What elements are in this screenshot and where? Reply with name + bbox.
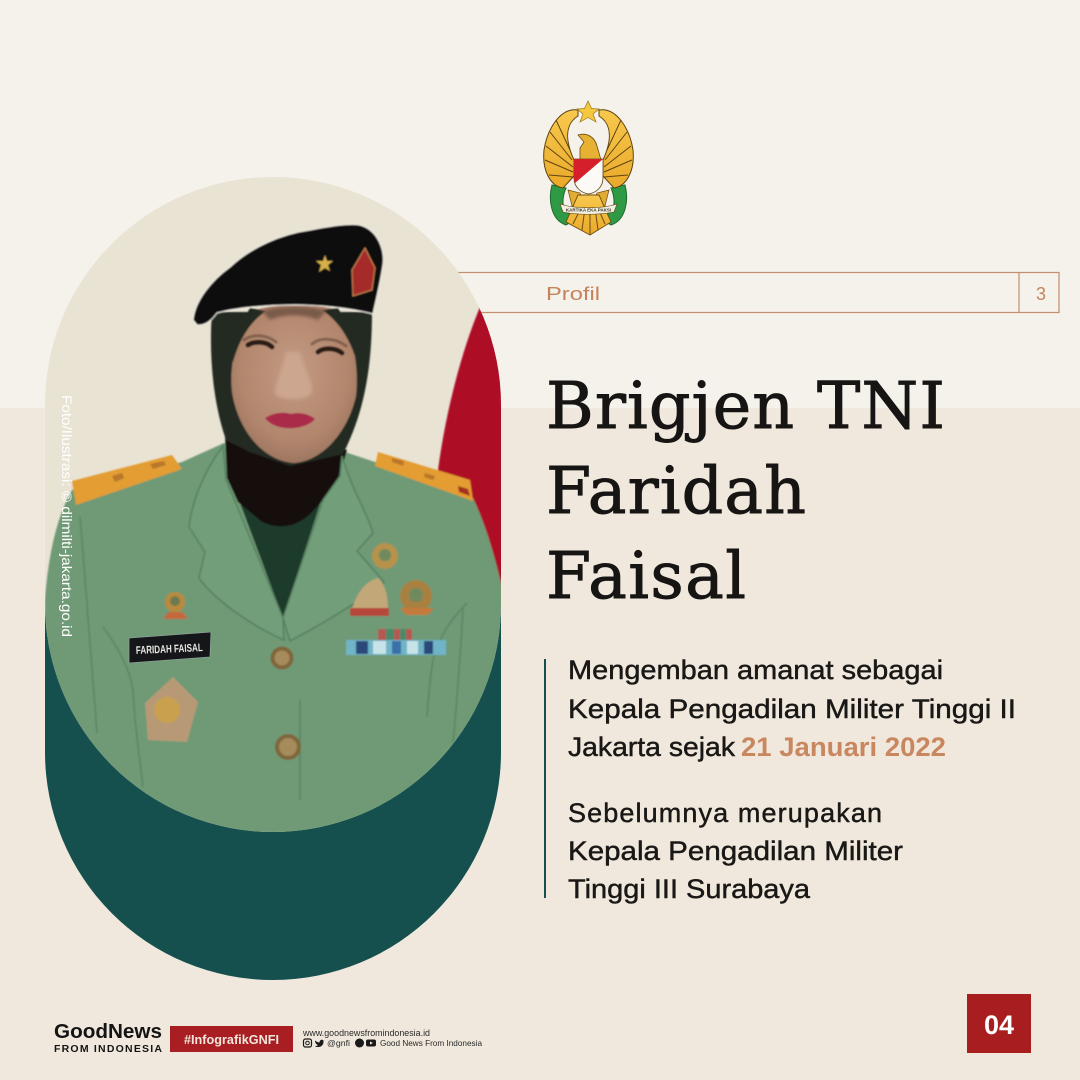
name tag (129, 632, 211, 663)
hashtag badge (170, 1026, 293, 1052)
left wing (544, 110, 578, 188)
forehead shadow (262, 306, 326, 320)
body text: second paragraph: Kepala Pengadilan Militer (568, 836, 903, 866)
beret star (316, 255, 333, 272)
right wing (599, 110, 633, 188)
title: Brigjen TNI (546, 369, 945, 444)
brows and eyes (244, 336, 346, 353)
body text: first paragraph (568, 655, 1016, 762)
body text: first paragraph: Jakarta sejak (568, 732, 736, 762)
buttons (270, 646, 301, 760)
beret red badge (352, 248, 375, 296)
icon: instagram (304, 1039, 312, 1047)
left epaulette (72, 455, 182, 505)
face (231, 305, 357, 463)
icon: facebook (355, 1038, 364, 1048)
motto ribbon: KARTIKA EKA PAKSI (566, 208, 611, 212)
body text: second paragraph (568, 798, 903, 904)
red flag (438, 307, 505, 600)
star (577, 101, 599, 122)
teal capsule backdrop (45, 300, 501, 980)
icon: twitter (315, 1040, 324, 1047)
eagle (578, 134, 601, 160)
photo credit: Foto/Ilustrasi: © dilmilti-jakarta.go.id (59, 395, 75, 637)
footer logo: GoodNews (54, 1021, 162, 1043)
footer logo: FROM INDONESIA (54, 1043, 162, 1055)
black neck scarf (225, 435, 347, 526)
body text: first paragraph: 21 Januari 2022 (741, 732, 946, 762)
body text: second paragraph: Tinggi III Surabaya (568, 874, 811, 904)
left small pin (163, 592, 188, 619)
section bar: Profil (440, 272, 1059, 313)
page number (967, 994, 1031, 1053)
lips (265, 413, 315, 428)
right lapel (283, 456, 384, 641)
jacket seams (80, 517, 467, 800)
uniform jacket (45, 443, 505, 840)
emblem (544, 101, 633, 235)
nose (275, 352, 312, 399)
shield (574, 159, 603, 194)
footer website and social: www.goodnewsfromindonesia.id (302, 1028, 430, 1038)
vertical rule (544, 659, 546, 898)
section bar: Profil: 3 (1036, 284, 1046, 304)
title: Faridah (546, 454, 806, 529)
page number: 04 (984, 1010, 1014, 1040)
large medal (145, 677, 198, 742)
wing feather lines (545, 120, 632, 177)
name tag: FARIDAH FAISAL (136, 642, 203, 657)
left lapel (189, 446, 284, 640)
footer website and social: Good News From Indonesia (380, 1038, 482, 1048)
hijab inner edge at temples (233, 308, 357, 362)
green wreath (550, 185, 627, 225)
portrait photo illustration (45, 177, 505, 840)
footer logo (54, 1021, 162, 1055)
right pins (350, 543, 434, 616)
beret (193, 224, 383, 325)
ribbon bars (346, 629, 446, 655)
hijab (211, 312, 372, 466)
tail (566, 195, 611, 235)
hashtag badge: #InfografikGNFI (184, 1033, 279, 1047)
footer website and social (302, 1028, 482, 1048)
tail feather lines (573, 208, 605, 235)
right epaulette (375, 452, 473, 501)
footer website and social: @gnfi (327, 1038, 350, 1048)
section bar: Profil: Profil (546, 284, 600, 304)
claws (568, 190, 609, 206)
body text: first paragraph: Mengemban amanat sebagai (568, 655, 943, 685)
title: Faisal (546, 539, 746, 614)
icon: youtube (366, 1040, 376, 1046)
title (546, 369, 945, 614)
shield red half (574, 159, 603, 183)
body text: second paragraph: Sebelumnya merupakan (568, 798, 882, 828)
dark green inner collar (240, 502, 321, 616)
body text: first paragraph: Kepala Pengadilan Militer Tinggi II (568, 694, 1016, 724)
